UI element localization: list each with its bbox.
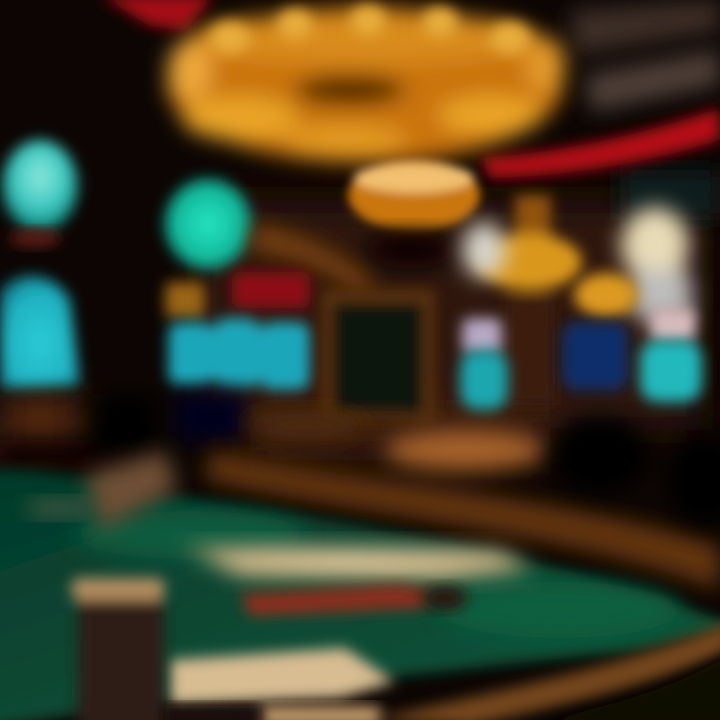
screen: left cyan upper [2, 140, 78, 232]
chips: red stack [240, 584, 430, 616]
chandelier: top glow spots [210, 5, 530, 54]
wood arch behind screens [250, 225, 375, 295]
red ceiling band: top left [100, 0, 215, 30]
lamp: right hanging lamp [478, 195, 582, 405]
screen: teal round globe [164, 178, 252, 270]
chandelier: large upper ring [167, 7, 565, 163]
chandelier: small lower lamp [348, 159, 480, 231]
shadow: beneath small lamp [365, 232, 455, 268]
card: cream rectangle front [170, 648, 395, 704]
sign: red and orange block [165, 272, 310, 318]
stack: left small strip [30, 500, 90, 516]
table: green felt [0, 469, 720, 720]
lamp: left red glow [9, 229, 61, 247]
table: dark strip left of bottom card [165, 706, 260, 720]
stack: left foreground wood block [72, 578, 164, 720]
ceiling stripes: upper right [570, 0, 720, 220]
figures: cyan bases [460, 340, 702, 410]
stack: rear beige block [85, 450, 178, 530]
card: cream rectangle centre [180, 545, 535, 580]
shadow: below cyan panels [175, 392, 245, 442]
card: bottom strip [260, 706, 380, 720]
table: back wood rail [0, 411, 720, 590]
lamp: small amber right [574, 273, 638, 317]
table: front wood rim [370, 622, 720, 720]
figures: white upper shapes [462, 207, 692, 320]
chips: dark end of red stack [423, 586, 467, 610]
red ceiling band: right [480, 108, 720, 178]
dark seats: right foreground [95, 395, 720, 525]
figures: blue and white bodies [462, 308, 696, 390]
table: left felt lighter [75, 511, 305, 559]
board: dark green panel [322, 290, 434, 420]
background: warm wood wall [0, 200, 700, 460]
table: right felt bright [440, 582, 680, 638]
screen: left cyan lower [0, 276, 80, 388]
screen: row of cyan panels [168, 318, 310, 390]
